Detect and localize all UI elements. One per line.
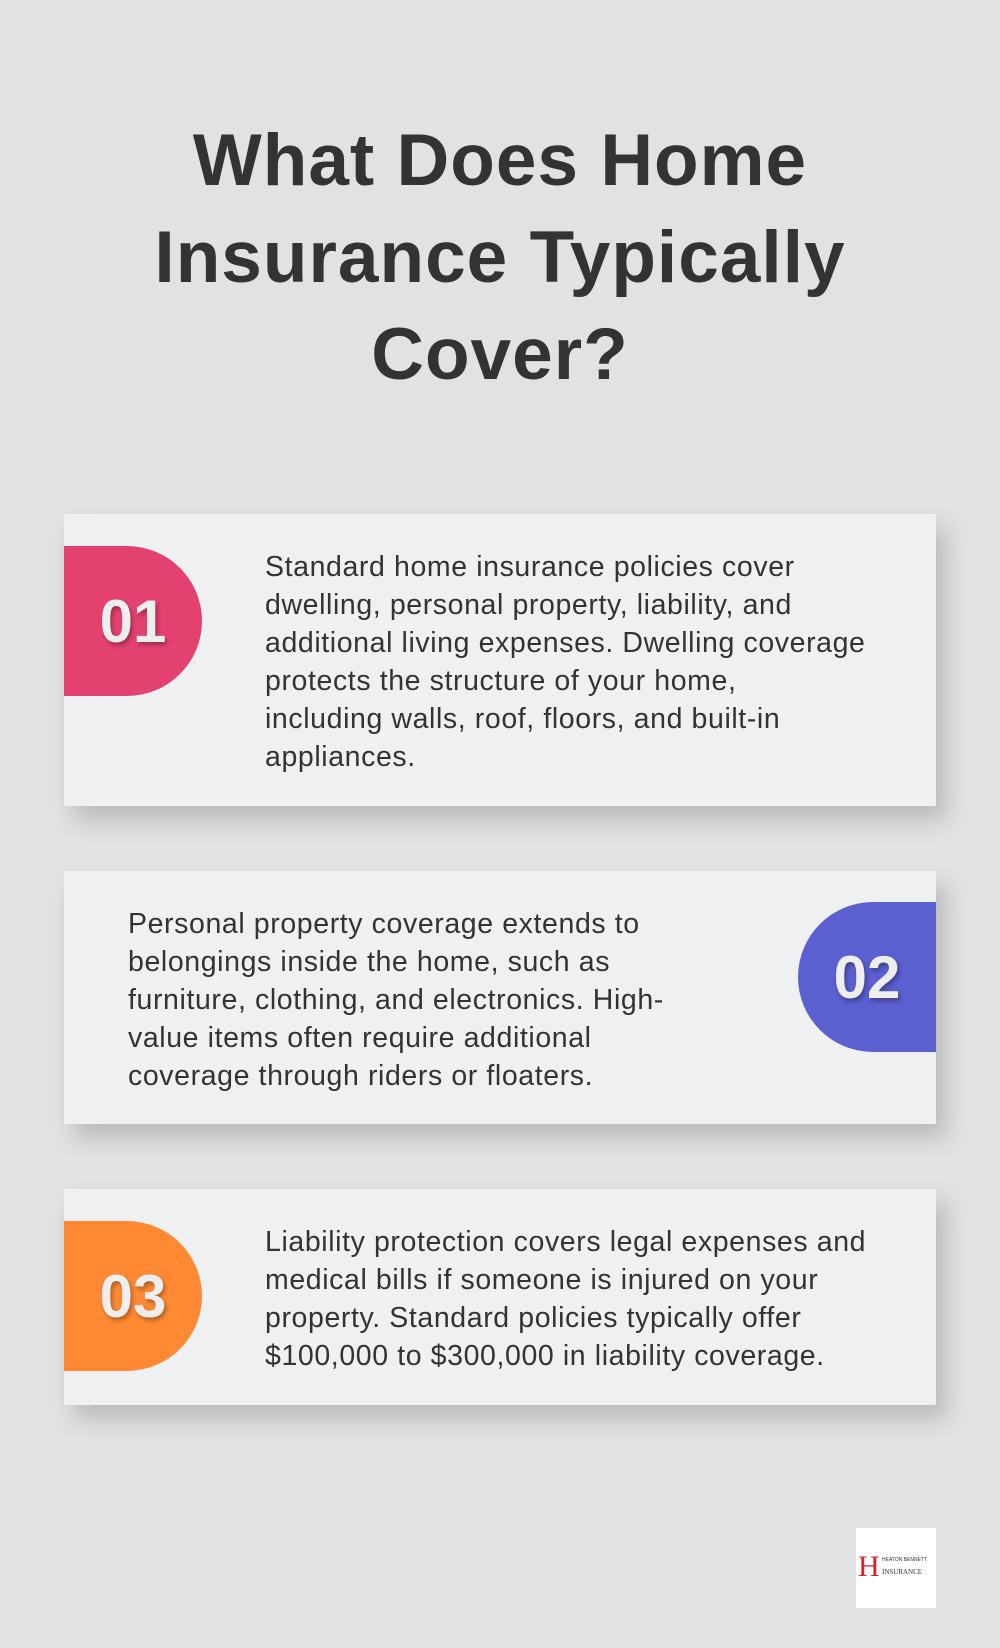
badge 01: 01 <box>100 588 166 654</box>
text 3: medical bills if someone is injured on your <box>265 1264 818 1296</box>
text 1: protects the structure of your home, <box>265 665 736 697</box>
title: What Does Home <box>193 120 807 201</box>
text 3: $100,000 to $300,000 in liability coverage. <box>265 1340 825 1372</box>
text 1: additional living expenses. Dwelling coverage <box>265 627 866 659</box>
badge 03: 03 <box>100 1262 166 1330</box>
text 2: coverage through riders or floaters. <box>128 1060 593 1092</box>
logo: H <box>858 1550 880 1583</box>
text 3 <box>265 1226 866 1372</box>
text 1 <box>265 551 866 773</box>
text 1: Standard home insurance policies cover <box>265 551 795 583</box>
text 1: including walls, roof, floors, and built-in <box>265 703 780 735</box>
text 1: appliances. <box>265 741 416 773</box>
text 1: dwelling, personal property, liability, and <box>265 589 792 621</box>
text 3: property. Standard policies typically offer <box>265 1302 801 1334</box>
text 2: furniture, clothing, and electronics. High- <box>128 984 664 1016</box>
text 2: value items often require additional <box>128 1022 592 1054</box>
panel: card 3 <box>64 1189 936 1405</box>
badge 02 <box>798 902 936 1052</box>
logo <box>856 1528 936 1608</box>
title: Cover? <box>371 314 629 395</box>
title: Insurance Typically <box>154 217 846 298</box>
panel: card 2 <box>64 871 936 1124</box>
title <box>154 120 846 395</box>
badge 02: 02 <box>834 944 900 1010</box>
text 3: Liability protection covers legal expenses and <box>265 1226 866 1258</box>
logo: HEATON BENNETT <box>882 1557 927 1563</box>
badge 01 <box>64 546 202 696</box>
text 2: belongings inside the home, such as <box>128 946 610 978</box>
panel: card 1 <box>64 514 936 806</box>
badge 03 <box>64 1221 202 1371</box>
text 2: Personal property coverage extends to <box>128 908 640 940</box>
text 2 <box>128 908 664 1092</box>
logo: INSURANCE <box>882 1568 922 1576</box>
